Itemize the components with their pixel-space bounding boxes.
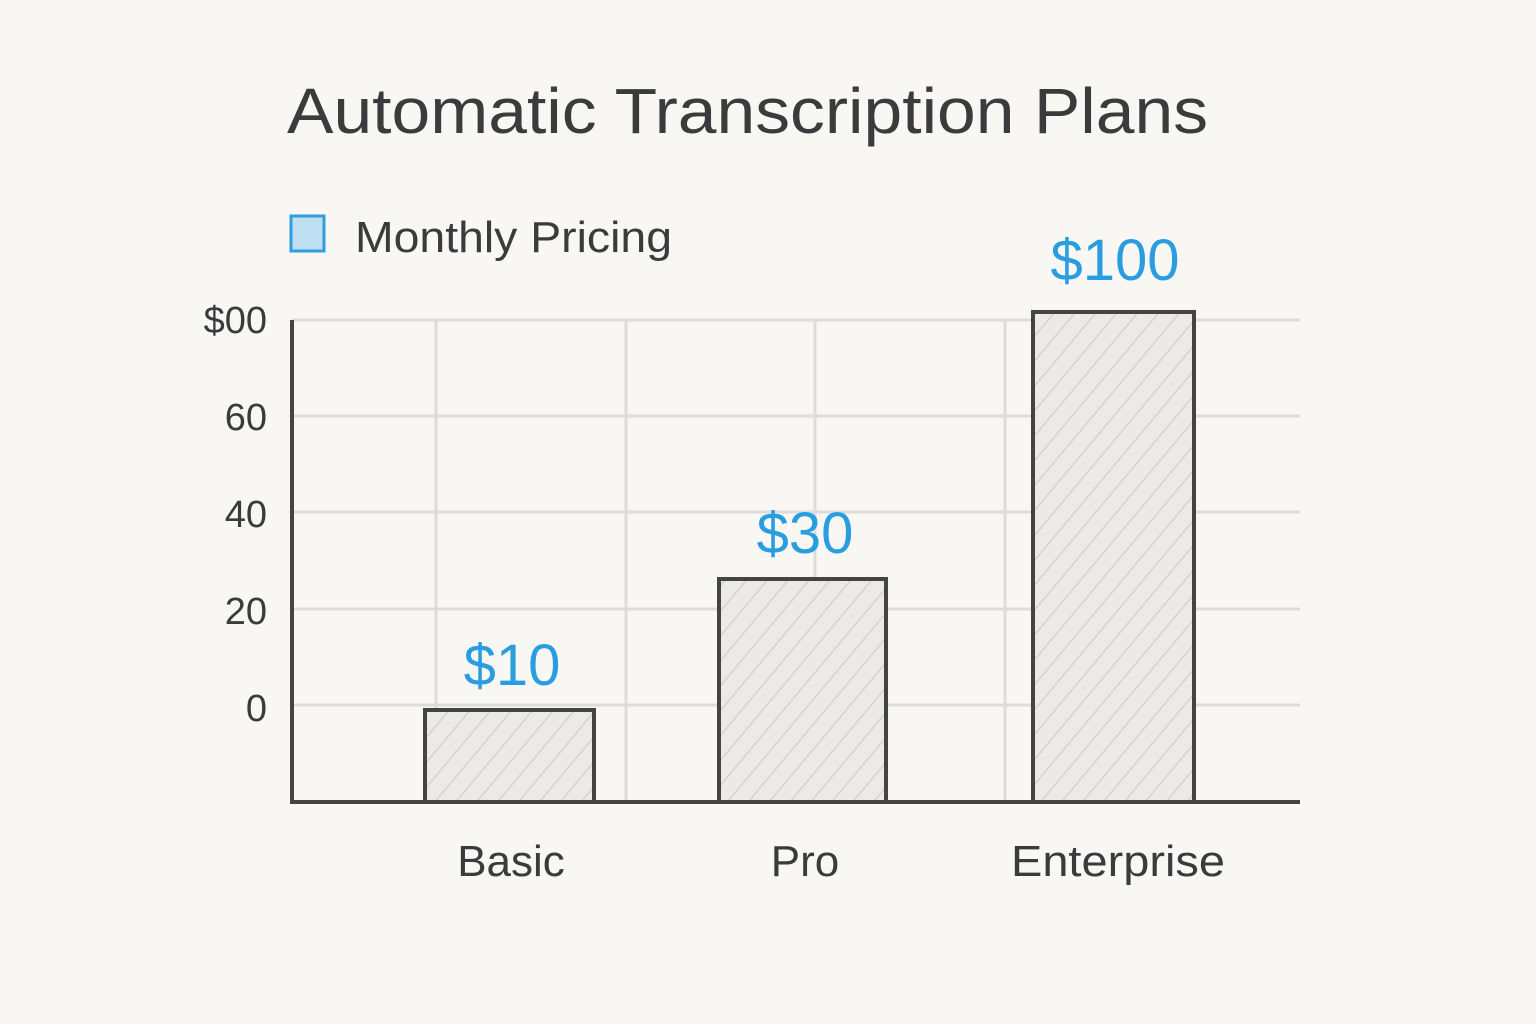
axes bbox=[290, 320, 1300, 803]
y axis labels: $00 bbox=[204, 300, 267, 342]
y axis labels: 0 bbox=[246, 688, 267, 730]
gridlines bbox=[292, 320, 1300, 802]
x axis labels bbox=[457, 837, 1225, 886]
bar: Enterprise: $100 bbox=[1050, 228, 1180, 293]
y axis labels bbox=[204, 300, 267, 730]
legend: Monthly Pricing bbox=[355, 213, 672, 262]
bar: Pro: $30 bbox=[757, 501, 853, 566]
x axis labels: Pro bbox=[771, 837, 839, 886]
bar: Enterprise bbox=[1033, 228, 1194, 802]
y axis labels: 60 bbox=[225, 397, 267, 439]
bar: Pro bbox=[719, 501, 886, 802]
y axis labels: 40 bbox=[225, 494, 267, 536]
bar: Basic: $10 bbox=[464, 633, 560, 698]
title: Automatic Transcription Plans bbox=[287, 75, 1208, 147]
bar: Basic bbox=[425, 633, 594, 802]
x axis labels: Enterprise bbox=[1011, 837, 1225, 886]
y axis labels: 20 bbox=[225, 591, 267, 633]
x axis labels: Basic bbox=[457, 837, 565, 886]
